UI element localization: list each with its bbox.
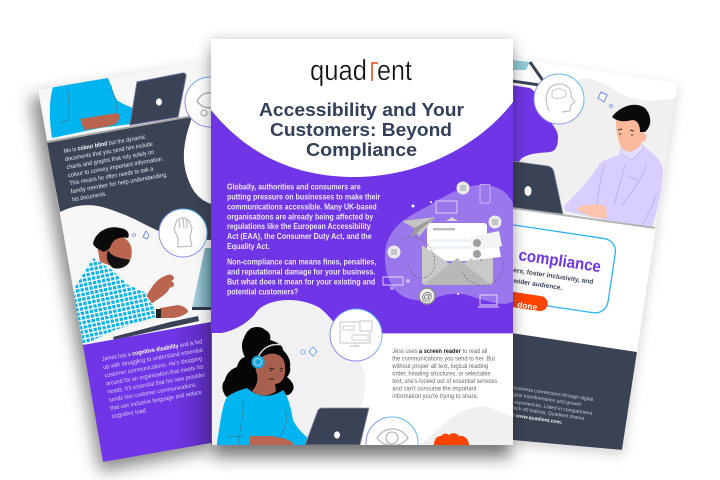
logo: quadient: quad (310, 55, 367, 87)
envelope back flap (446, 217, 458, 221)
at symbol: @ (421, 291, 433, 303)
text: Mo description: documents that you send him include (65, 141, 154, 163)
desk edge (505, 206, 655, 229)
dashed route (397, 237, 435, 278)
Jess: eyes (269, 368, 283, 379)
star (412, 204, 414, 208)
title: Accessibility and Your (259, 100, 464, 120)
James: raised arm (146, 274, 174, 304)
left page background (38, 60, 211, 345)
text: Mo description: his documents. (72, 190, 108, 203)
Jess: shirt fold lines (227, 400, 286, 445)
text: introduction: Non-compliance can means fines, penalties, (227, 257, 376, 267)
text: footer (492, 383, 594, 426)
icon: circle with eye (366, 417, 418, 469)
panel: left page (38, 64, 211, 462)
text: Jess description: without proper alt text, logical reading (391, 363, 489, 370)
grey blob behind Jess (211, 300, 365, 445)
text: Jess description: and can't consume the important (392, 385, 477, 392)
man: shirt (564, 146, 663, 227)
icon circle (456, 182, 470, 194)
shadow: right page (513, 62, 678, 456)
text: footer: Next Tech 40 indices, Quadient shares (499, 403, 585, 422)
orange button (469, 286, 549, 312)
Jess: hair (222, 327, 294, 398)
centre page background (211, 39, 513, 445)
James: keyboard (113, 316, 199, 340)
desk white panel (505, 208, 655, 352)
right page monitor (513, 60, 544, 86)
purple panel with dome cut-out (211, 102, 513, 333)
icon: circle with screen (330, 309, 382, 361)
text: Jess description (391, 348, 497, 400)
bullet dot (406, 279, 410, 283)
icon: circle with eye (184, 76, 211, 128)
James: shirt (74, 258, 158, 345)
sparkle (598, 92, 607, 102)
text: footer: visit www.quadient.com. (506, 412, 563, 426)
text: Mo description: family member for help understanding (70, 172, 167, 195)
title: Customers: Beyond (270, 120, 452, 140)
man: face (616, 120, 647, 152)
panel: right page (513, 60, 678, 450)
Jess: headband (258, 344, 282, 357)
man: eyes (618, 129, 634, 136)
Jess: headphone (252, 356, 264, 368)
text: James description: around for an organisation that meets his (105, 363, 204, 387)
text: introduction: But what does it mean for your existing and (227, 277, 375, 287)
divider (330, 333, 513, 334)
title (259, 100, 464, 160)
text: James description: customer communications. He's shopping (104, 355, 203, 379)
man: collar (620, 142, 644, 160)
phone icon (480, 184, 490, 203)
panel: dark text panel (47, 114, 211, 240)
text: introduction: and reputational damage for your business. (227, 267, 375, 277)
Jess: laptop (305, 408, 369, 445)
Jess: forearm (249, 436, 293, 445)
dashed route (462, 254, 504, 285)
Jess: shirt (217, 388, 307, 445)
right page grey blob (519, 78, 676, 228)
text: Jess description: order, heading structures, or selectable (392, 371, 491, 378)
James: monitor edge (192, 307, 211, 310)
James: beard (107, 250, 130, 269)
text: Jess description: information you're trying to share. (392, 393, 479, 400)
compliance outlined box (411, 211, 617, 315)
illustration: James (74, 227, 215, 345)
icon: circle with head (534, 74, 584, 124)
envelope letter (427, 223, 487, 261)
left page: shirt fold lines (60, 85, 117, 123)
text: Mo description: This means he often needs to ask a (69, 166, 154, 187)
man: hair (612, 105, 650, 132)
text: compliance body: reach a wider audience. (488, 274, 563, 292)
man: hands (576, 204, 607, 218)
text: introduction: Globally, authorities and consumers are (227, 182, 361, 192)
card avatar (473, 239, 481, 247)
text: introduction: Equality Act. (227, 241, 270, 251)
text: footer: customer experiences. Listed in compartment (492, 396, 593, 417)
text: Mo description (63, 131, 169, 203)
man: shirt lines (597, 165, 656, 226)
text: James description: up with struggling to understand essential (103, 347, 203, 371)
sparkle dot (609, 104, 613, 108)
lilac blob (385, 185, 516, 304)
purple page edge (211, 333, 212, 445)
left page: desk edge (47, 115, 193, 143)
text: compliance body: customers, foster inclusivity, and (490, 264, 594, 286)
text: introduction: organisations are already being affected by (227, 211, 374, 221)
James: hair (93, 227, 129, 252)
text: introduction: Act (EAA), the Consumer Duty Act, and the (227, 231, 372, 241)
footer dark panel (505, 332, 637, 450)
shadow: left page (30, 70, 211, 472)
card avatar (473, 250, 481, 258)
panel: centre page (211, 39, 516, 469)
left page: arm (80, 113, 120, 130)
profile card (470, 246, 501, 260)
grey blob lower right (420, 407, 513, 445)
text: introduction: communications accessible. Many UK-based (227, 201, 377, 211)
star (430, 201, 432, 203)
left page: laptop (130, 73, 186, 125)
James: neck and face (97, 236, 132, 267)
text: footer: digital transformation and growth (509, 391, 582, 408)
illustration: envelope and icons (383, 182, 516, 307)
text: introduction: potential customers? (227, 287, 298, 297)
orange button: done (517, 300, 538, 312)
text: James description: cognitive load. (111, 407, 148, 420)
panel: purple text panel (83, 322, 211, 462)
right page laptop (505, 160, 563, 214)
white blob beside centre page (184, 112, 211, 204)
illustration: man (564, 105, 663, 227)
James: typing hand (160, 305, 188, 318)
logo: quadient: ent (377, 55, 412, 87)
text: introduction: regulations like the European Accessibility (227, 221, 371, 231)
plane fold (411, 217, 435, 238)
Jess: face and neck (252, 354, 285, 396)
James: monitor (192, 248, 211, 307)
text: James description (102, 339, 205, 418)
text: Mo description: Mo is colour blind but the dynamic (63, 134, 146, 155)
laptop icon (478, 295, 499, 307)
envelope body (422, 245, 493, 285)
text: compliance heading: compliance (517, 246, 602, 276)
letter line (431, 246, 476, 249)
text: James description: that use inclusive language and reduce (110, 389, 203, 412)
icon: circle with hand (159, 209, 207, 257)
text: introduction: putting pressure on businesses to make their (227, 192, 381, 202)
star (457, 293, 459, 295)
title: Compliance (306, 140, 417, 160)
sparkle dot (133, 234, 135, 236)
text: Jess description: the communications you send to her. But (392, 356, 495, 363)
logo: quadient (310, 55, 412, 87)
profile card (470, 231, 502, 252)
laptop dot (524, 186, 532, 196)
text: Mo description: charts and graphs that rely solely on (66, 149, 155, 171)
left page: laptop dot (156, 98, 162, 106)
sparkle dot (301, 350, 305, 354)
letter line (433, 228, 455, 230)
text: James description: needs. It's essential that his new provider (107, 372, 206, 396)
James: watch (156, 309, 161, 318)
sparkle (143, 231, 149, 239)
card icon (436, 201, 457, 213)
icon circle (388, 246, 400, 258)
sparkle (309, 347, 317, 356)
shadow: centre page (213, 45, 511, 457)
right page purple blob (513, 85, 558, 162)
paper plane (402, 217, 435, 237)
letter line (431, 239, 469, 242)
text: James description: James has a cognitive disability and is fed (101, 338, 203, 363)
mailbox icon (383, 277, 403, 289)
text: Mo description: colour to convey important information. (67, 155, 164, 179)
illustration: Jess (217, 327, 369, 445)
envelope lower flap (424, 258, 491, 285)
text: Jess description: text, she's locked out of essential services (392, 378, 497, 385)
text: James description: sends him customer communications (108, 382, 196, 404)
text: footer: enable business connections through digital (497, 383, 594, 403)
orange blob (434, 433, 469, 445)
left page: blue shirt (50, 78, 133, 138)
lower white section (211, 333, 513, 445)
icon circle (488, 216, 502, 228)
text: introduction (227, 182, 381, 297)
Jess: laptop dot (334, 431, 340, 439)
text: Jess description: Jess uses a screen reader to read all (392, 348, 487, 355)
right page background (513, 60, 678, 330)
